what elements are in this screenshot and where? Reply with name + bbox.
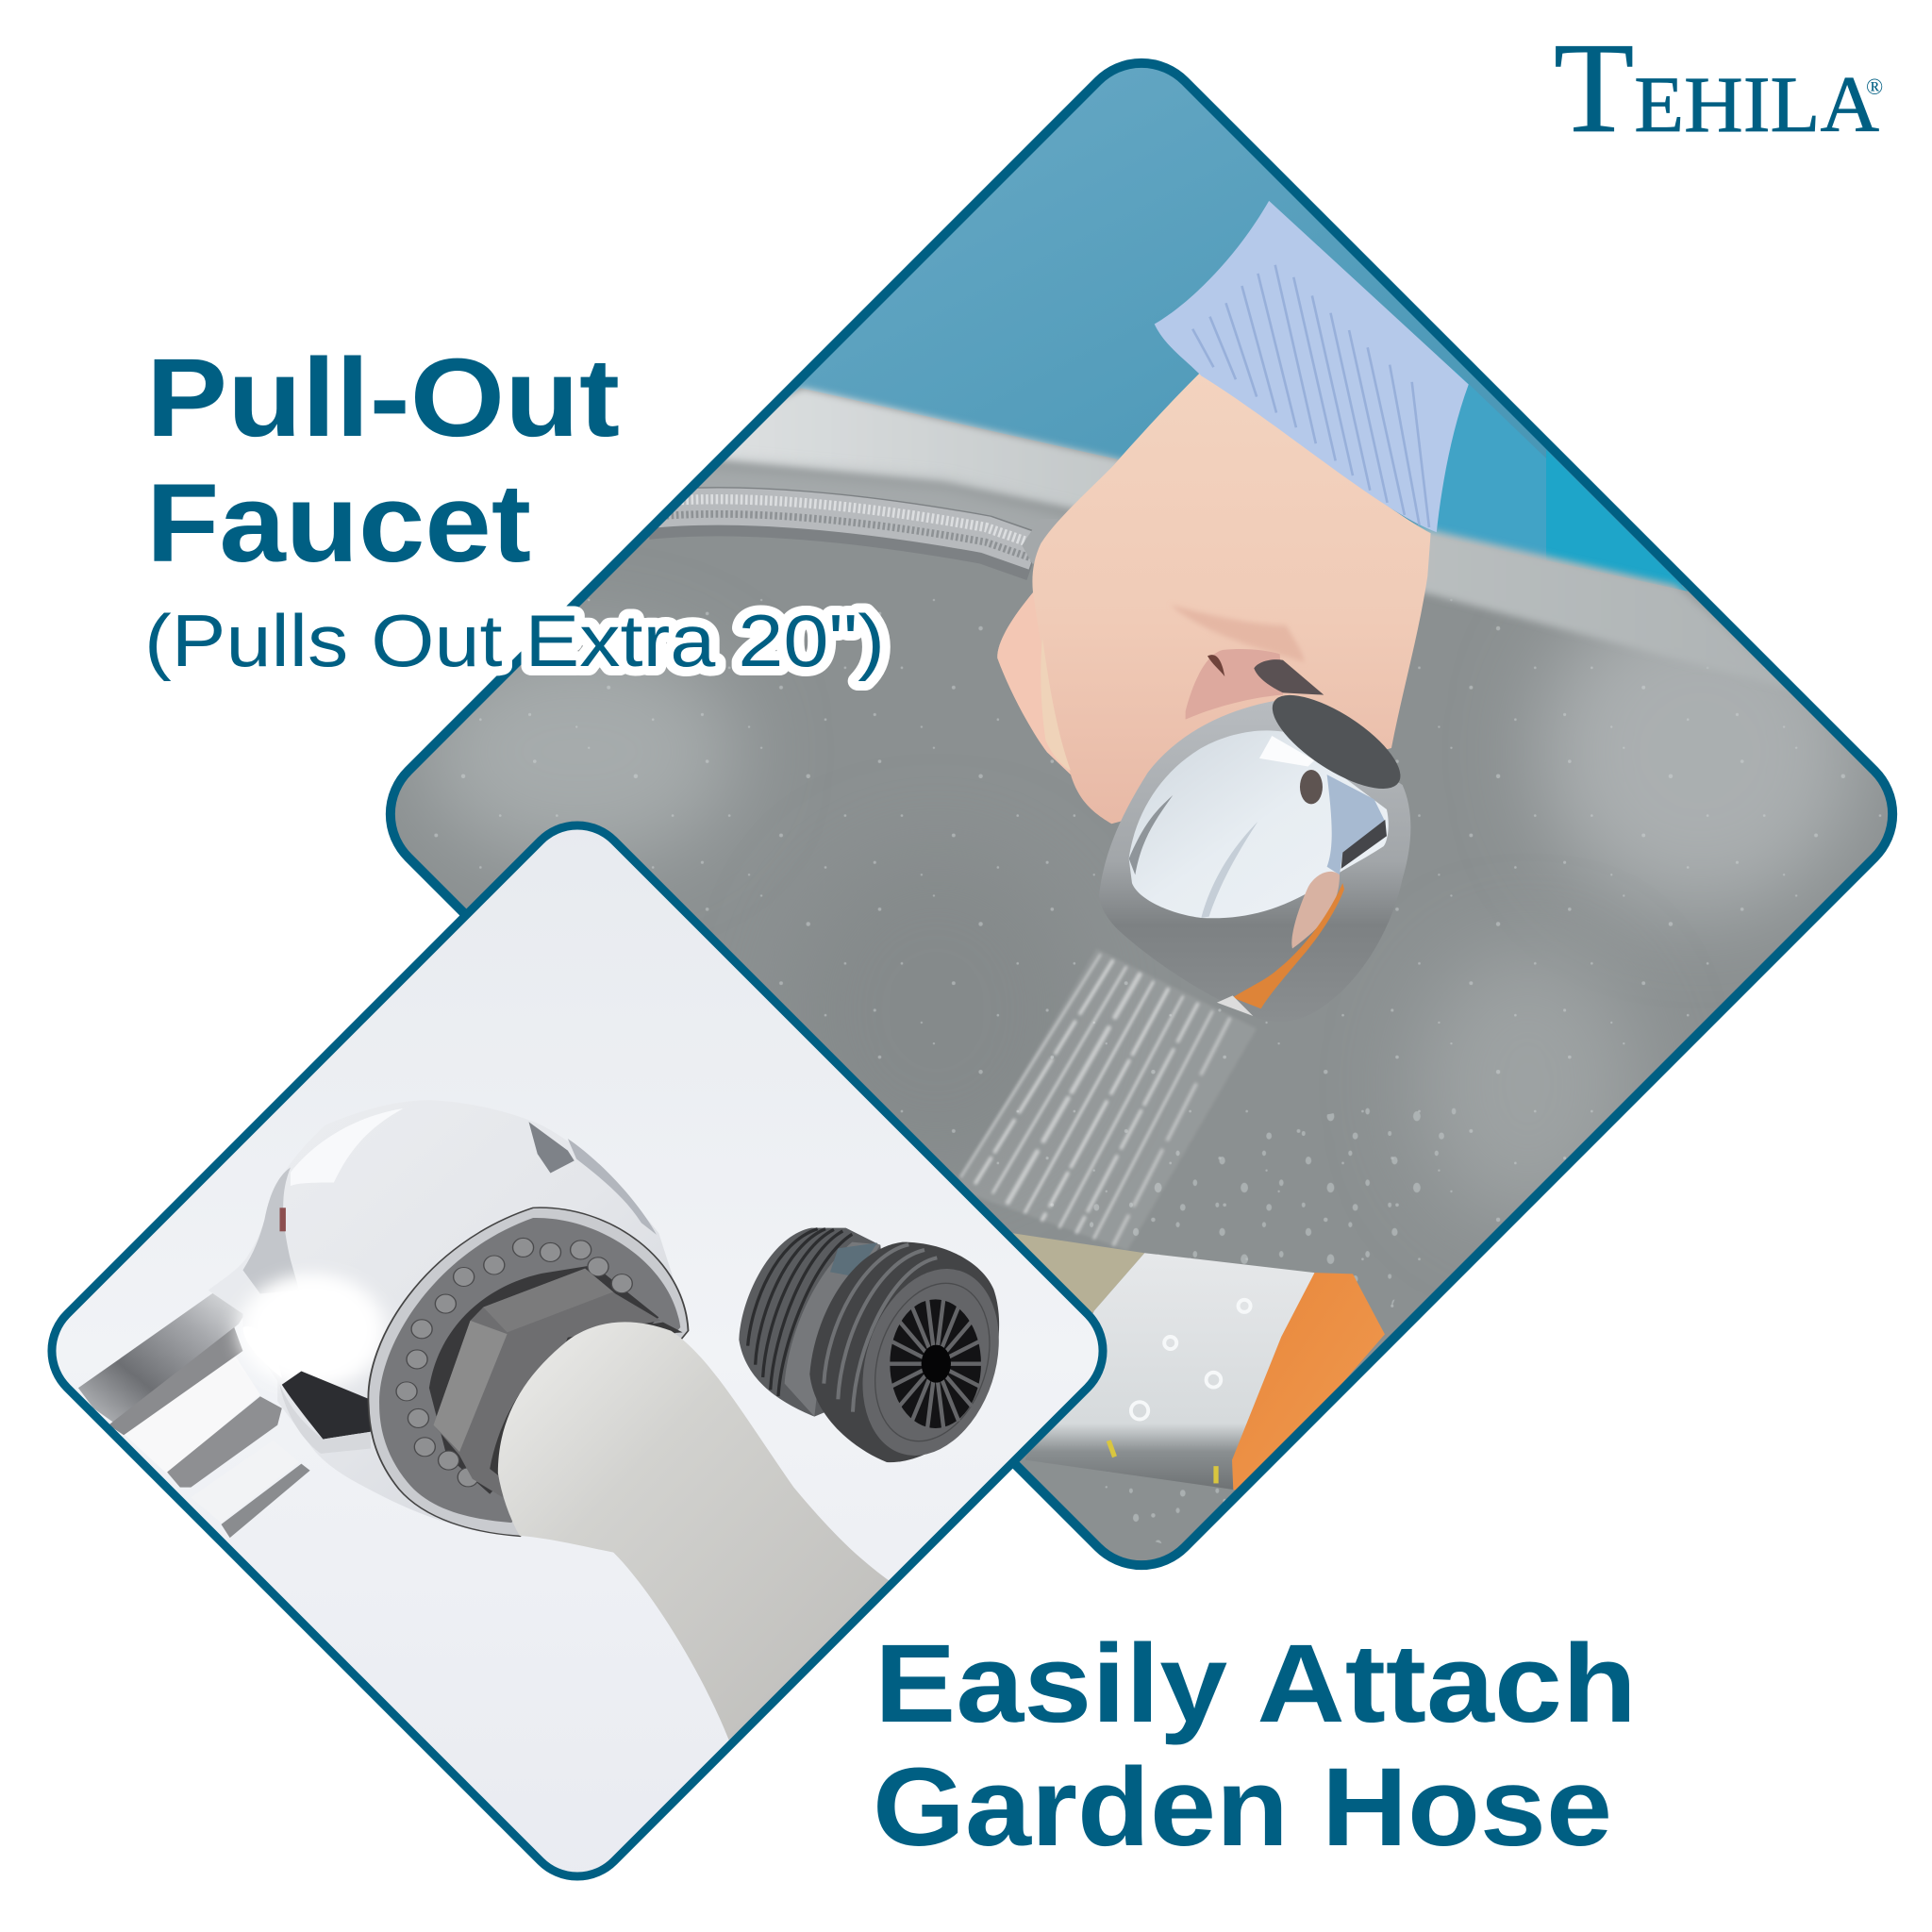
registered mark: ® <box>1866 75 1883 100</box>
hand gripping the sprayer <box>997 372 1431 824</box>
hex nut <box>434 1269 661 1497</box>
reflected crease <box>1201 822 1257 918</box>
rib highlights <box>824 1244 937 1412</box>
collar shadow <box>490 1323 683 1482</box>
grille spokes <box>889 1299 983 1429</box>
big diamond border <box>365 38 1918 1591</box>
faucet arm lit window <box>122 1347 260 1474</box>
rubber nozzle disc <box>1263 676 1409 807</box>
chrome sprayer head <box>1099 676 1410 1022</box>
little finger <box>997 592 1071 774</box>
reflected orange brush <box>1233 883 1344 1008</box>
hose adapter <box>739 1228 1022 1474</box>
threaded body <box>739 1228 893 1417</box>
photo: faucet spout with aerator adapter <box>78 1100 1022 1740</box>
turquoise panel behind the sink <box>1417 370 1546 560</box>
brand logo: TEHILA <box>1554 16 1879 159</box>
paint flecks <box>1107 1440 1219 1483</box>
black reflection patch <box>282 1371 371 1440</box>
collar ribs <box>809 1242 999 1462</box>
nut bright facet <box>434 1321 508 1452</box>
face inset ring <box>856 1268 1008 1456</box>
grey tube and adapter layer <box>498 1322 895 1740</box>
small diamond border <box>30 804 1124 1898</box>
sleeve ribbing <box>1192 265 1429 527</box>
blue tinted highlight <box>830 1242 877 1276</box>
heading line 1: Pull-Out <box>146 336 620 460</box>
blue knitted sleeve <box>1155 201 1469 532</box>
dome left reflection <box>242 1167 299 1293</box>
chrome dome <box>208 1100 689 1536</box>
small diamond background <box>30 804 1124 1898</box>
back of hand <box>997 372 1431 824</box>
threads <box>748 1229 852 1396</box>
palm gap <box>1186 649 1283 720</box>
panel: pull-out sprayer photo diamond <box>365 37 1918 1591</box>
ring inner face <box>379 1218 680 1523</box>
reflected faucet glitter <box>1129 795 1173 874</box>
reflected arm <box>1291 872 1340 948</box>
faucet arm upper bar <box>78 1291 247 1425</box>
faucet arm edge <box>108 1327 242 1435</box>
heading line 2: Faucet <box>146 461 531 586</box>
dome red reflection <box>279 1208 286 1231</box>
heading line 2: Garden Hose <box>873 1745 1612 1870</box>
sink rim <box>723 383 1765 668</box>
chrome lower lip <box>279 1385 371 1454</box>
grey garden hose <box>498 1322 895 1740</box>
smooth neck <box>785 1242 880 1417</box>
dome rim reflection <box>568 1139 657 1235</box>
faucet arm lower bar <box>167 1396 282 1488</box>
faucet arm thin bar <box>221 1464 310 1538</box>
reflected window glare <box>1259 736 1314 766</box>
slotted grille <box>890 1299 981 1428</box>
water droplets on the sink <box>370 591 1909 1577</box>
sprayer trigger <box>1254 659 1324 695</box>
finger crease highlight <box>1041 638 1071 771</box>
panel: garden hose adapter photo diamond <box>30 804 1124 1898</box>
photo: sprayer rinsing a paint brush in a sink <box>370 37 1909 1590</box>
drops on the brush <box>1131 1300 1251 1420</box>
reflected person <box>1327 774 1385 874</box>
braided hose <box>647 499 1035 559</box>
centre hole <box>922 1345 951 1383</box>
dome top highlight <box>291 1108 403 1186</box>
sink, wall, hose and spray <box>370 37 1909 1590</box>
heading line 1: Easily Attach <box>874 1622 1637 1746</box>
spray hole bumps <box>396 1238 632 1487</box>
palm gap shadow <box>1208 655 1224 676</box>
mirrored reflection <box>1129 730 1389 918</box>
subheading with white halo: (Pulls Out Extra 20") <box>144 599 885 682</box>
blue wall <box>790 68 1683 585</box>
blown highlight <box>239 1274 386 1388</box>
sink basin <box>394 389 1889 1560</box>
ring chrome rim <box>368 1208 689 1536</box>
nut top facet <box>483 1269 613 1332</box>
sprayer neck connector <box>1023 530 1043 564</box>
chrome faucet body and aerator ring <box>78 1100 689 1538</box>
heading: pull-out faucet <box>146 336 620 586</box>
adapter face <box>840 1251 1022 1474</box>
dome dark wedge <box>529 1122 575 1174</box>
faucet arm white gap <box>191 1441 299 1523</box>
knuckle shading <box>1175 607 1304 660</box>
bright specular <box>242 1326 282 1378</box>
paint brush <box>1013 1233 1385 1493</box>
ring dark recess <box>429 1265 658 1494</box>
water spray <box>955 949 1257 1251</box>
heading: easily attach garden hose <box>873 1622 1637 1870</box>
soft transition below the rim <box>698 456 1066 530</box>
